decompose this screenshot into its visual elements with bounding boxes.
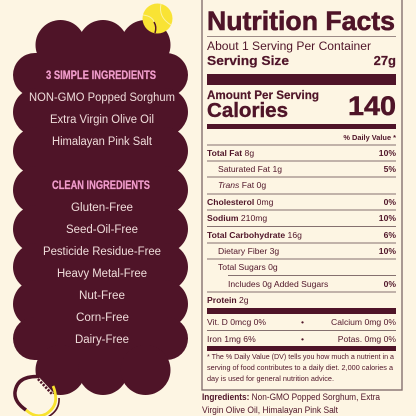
vitamins and minerals: • [301,334,304,344]
ingredients statement: Virgin Olive Oil, Himalayan Pink Salt [202,405,338,415]
icon: tennis ball [142,4,172,34]
nutrient rows: Saturated Fat 1g [218,164,282,174]
nutrient rows: 10% [379,148,396,158]
nutrient rows: Trans Fat 0g [218,180,266,190]
clean claims list: Seed-Oil-Free [66,224,138,236]
nutrition facts panel [202,0,402,390]
ingredient list: NON-GMO Popped Sorghum [29,92,175,104]
ingredients statement [202,392,380,415]
vitamins and minerals: Calcium 0mg 0% [331,317,396,327]
icon: tennis racket [15,376,59,416]
nutrient rows: 10% [379,213,396,223]
nutrient rows: 0% [384,279,396,289]
nutrient rows: 0% [384,197,396,207]
clean claims list: Pesticide Residue-Free [43,246,161,258]
serving information: About 1 Serving Per Container [207,41,371,53]
serving information: Serving Size [207,53,289,68]
calories [207,90,396,122]
nutrient rows: Dietary Fiber 3g [218,246,279,256]
ingredient list [29,92,175,148]
nutrient rows: 5% [384,164,396,174]
clean claims list: Gluten-Free [71,202,133,214]
serving information: 27g [374,53,396,68]
heading: 3 simple ingredients: 3 SIMPLE INGREDIENTS [46,68,156,82]
serving information [207,41,396,68]
clean claims list: Dairy-Free [75,334,129,346]
vitamins and minerals: Potas. 0mg 0% [338,334,396,344]
footnote [207,354,394,383]
nutrient rows [207,144,396,305]
nutrient rows: Includes 0g Added Sugars [228,279,328,289]
footnote: serving of food contributes to a daily diet. 2,000 calories a [207,365,393,372]
clean claims list [43,202,161,346]
nutrient rows: Protein 2g [207,295,249,305]
clean claims list: Heavy Metal-Free [57,268,147,280]
scalloped ingredients panel [13,20,188,395]
nutrient rows: Sodium 210mg [207,213,267,223]
nutrient rows: Total Sugars 0g [218,262,278,272]
vitamins and minerals: • [301,317,304,327]
vitamins and minerals [207,317,396,344]
calories: Amount Per Serving [207,90,319,102]
vitamins and minerals: Iron 1mg 6% [207,334,256,344]
footnote: * The % Daily Value (DV) tells you how much a nutrient in a [207,354,394,361]
heading: clean ingredients: CLEAN INGREDIENTS [52,178,150,192]
nutrient rows: Cholesterol 0mg [207,197,274,207]
nutrient rows: Total Fat 8g [207,148,254,158]
nutrient rows: 6% [384,230,396,240]
calories: Calories [207,100,288,122]
clean claims list: Corn-Free [76,312,129,324]
footnote: day is used for general nutrition advice. [207,376,334,383]
ingredient list: Himalayan Pink Salt [52,136,153,148]
calories: 140 [348,91,396,121]
nutrient rows: 10% [379,246,396,256]
nutrient rows: Total Carbohydrate 16g [207,230,302,240]
vitamins and minerals: Vit. D 0mcg 0% [207,317,266,327]
ingredients statement: Ingredients: Non-GMO Popped Sorghum, Extra [202,392,380,402]
ingredient list: Extra Virgin Olive Oil [50,114,154,126]
daily value header: % Daily Value * [343,133,396,142]
title: Nutrition Facts [207,6,395,36]
clean claims list: Nut-Free [79,290,125,302]
